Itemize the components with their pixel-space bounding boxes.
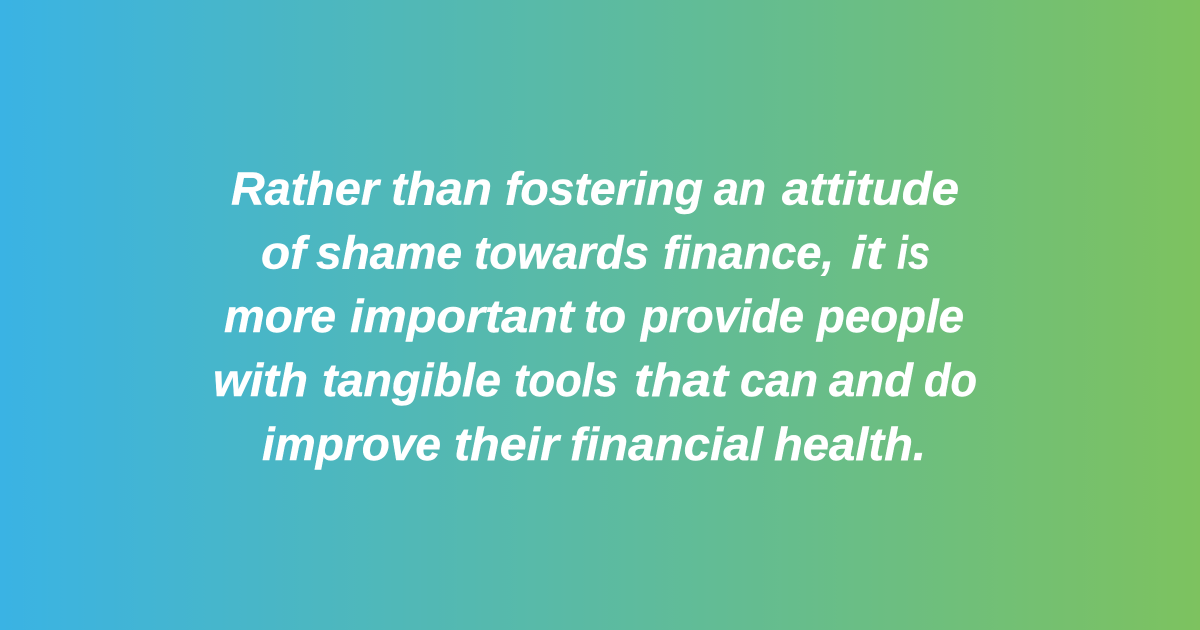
quote text: and [829, 354, 914, 406]
quote text: attitude [782, 162, 959, 214]
quote text: to [584, 290, 626, 342]
quote text: than [391, 162, 492, 214]
quote text: it [851, 226, 886, 278]
quote text: do [924, 354, 977, 406]
quote text: tools [514, 354, 618, 406]
quote text: can [740, 354, 818, 406]
quote text: finance, [663, 226, 834, 278]
quote text: shame [316, 226, 462, 278]
quote text: towards [474, 226, 649, 278]
quote text: with [213, 354, 308, 406]
quote text: of [261, 226, 311, 278]
quote text: health. [774, 418, 926, 470]
quote text: improve [262, 418, 441, 470]
quote text: important [350, 290, 576, 342]
quote text: financial [570, 418, 764, 470]
quote text [213, 162, 977, 470]
quote text: is [897, 226, 930, 278]
quote text: tangible [322, 354, 501, 406]
quote text: provide [639, 290, 804, 342]
quote text: fostering [505, 162, 703, 214]
quote text: more [224, 290, 336, 342]
quote text: Rather [231, 162, 381, 214]
quote text: an [714, 162, 766, 214]
quote text: their [454, 418, 561, 470]
quote text: that [634, 354, 730, 406]
quote text: people [815, 290, 964, 342]
